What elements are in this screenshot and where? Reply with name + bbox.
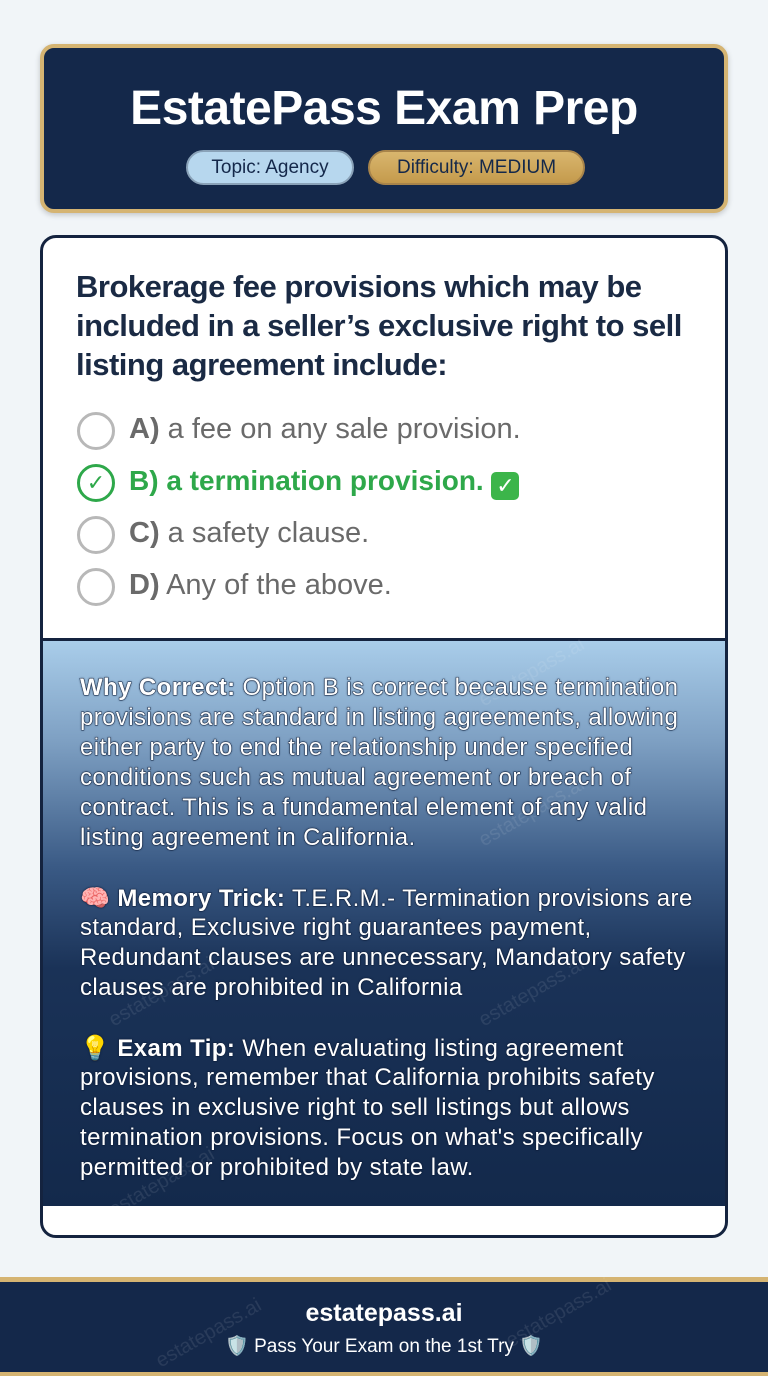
exam tip text: 💡 Exam Tip: When evaluating listing agreement: [80, 1035, 624, 1062]
explanation panel: estatepass.ai: [105, 1143, 218, 1221]
pill: topic: [186, 150, 354, 185]
question text: listing agreement include:: [76, 347, 447, 382]
exam tip text: clauses in exclusive right to sell listings but allows: [80, 1094, 630, 1121]
memory trick text: standard, Exclusive right guarantees payment,: [80, 914, 592, 941]
why correct text: [78, 674, 678, 852]
option B correct: [77, 464, 519, 502]
option B correct: ✓: [87, 470, 105, 495]
pill: difficulty: Difficulty: MEDIUM: [397, 157, 556, 178]
why correct text: either party to end the relationship under specified: [80, 734, 633, 761]
option B correct: ✓: [496, 473, 515, 498]
why correct text: contract. This is a fundamental element of any valid: [80, 794, 647, 821]
footer brand: estatepass.ai: [305, 1299, 463, 1327]
memory trick text: clauses are prohibited in California: [80, 974, 463, 1001]
question text: [76, 269, 682, 382]
question text: Brokerage fee provisions which may be: [76, 269, 642, 304]
question text: included in a seller’s exclusive right to sell: [76, 308, 682, 343]
why correct text: Why Correct: Option B is correct because termination: [80, 674, 678, 701]
footer tagline: 🛡️ Pass Your Exam on the 1st Try 🛡️: [225, 1336, 543, 1357]
exam tip text: permitted or prohibited by state law.: [80, 1154, 474, 1181]
options list: [77, 412, 521, 606]
pill: difficulty: [368, 150, 585, 185]
memory trick text: 🧠 Memory Trick: T.E.R.M.- Termination provisions are: [80, 885, 693, 912]
option C: C) a safety clause.: [129, 517, 369, 549]
footer: estatepass.ai: [502, 1274, 615, 1352]
option C: [77, 516, 369, 554]
explanation panel: estatepass.ai: [475, 773, 588, 851]
pill: topic: Topic: Agency: [211, 157, 329, 178]
memory trick text: Redundant clauses are unnecessary, Mandatory safety: [80, 944, 686, 971]
footer: [0, 1277, 768, 1376]
explanation panel: estatepass.ai: [105, 953, 218, 1031]
exam tip text: termination provisions. Focus on what's specifically: [80, 1124, 643, 1151]
why correct text: provisions are standard in listing agreements, allowing: [80, 704, 678, 731]
title: EstatePass Exam Prep: [130, 82, 638, 135]
exam tip text: provisions, remember that California prohibits safety: [80, 1064, 655, 1091]
explanation panel: estatepass.ai: [475, 953, 588, 1031]
header panel: [40, 44, 728, 213]
explanation panel: [43, 638, 725, 1206]
explanation panel: estatepass.ai: [475, 633, 588, 711]
memory trick text: [80, 885, 693, 1001]
option A: A) a fee on any sale provision.: [129, 413, 521, 445]
question card: [40, 235, 728, 1238]
footer: estatepass.ai: [152, 1294, 265, 1372]
why correct text: listing agreement in California.: [80, 824, 416, 851]
option D: D) Any of the above.: [129, 569, 392, 601]
exam tip text: [80, 1034, 655, 1181]
option B correct: B) a termination provision.: [129, 465, 484, 496]
why correct text: conditions such as mutual agreement or breach of: [80, 764, 632, 791]
